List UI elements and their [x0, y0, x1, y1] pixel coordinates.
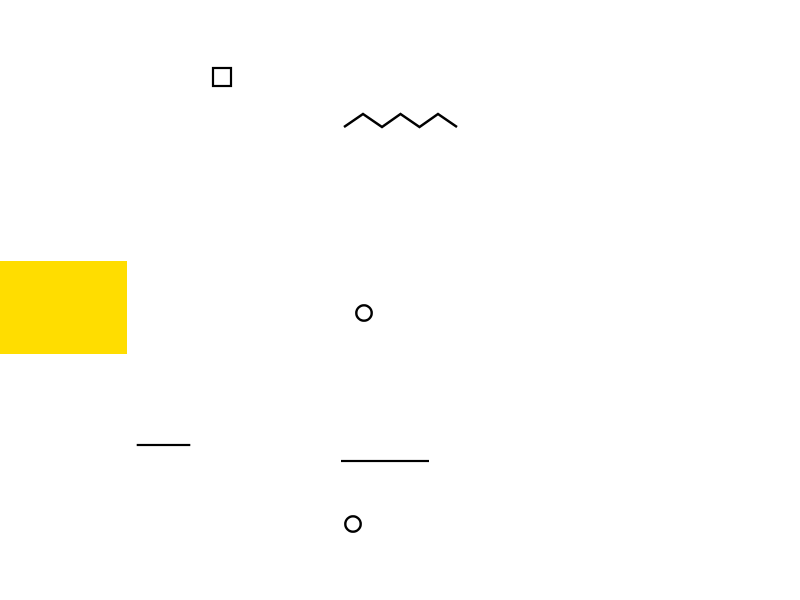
icon: upper circle — [356, 305, 372, 321]
long horizontal line — [341, 460, 429, 462]
icon: square outline — [213, 68, 231, 86]
icon: lower circle — [345, 516, 361, 532]
short horizontal line — [137, 444, 190, 446]
zigzag line — [344, 114, 457, 127]
panel: yellow rectangle — [0, 261, 127, 354]
